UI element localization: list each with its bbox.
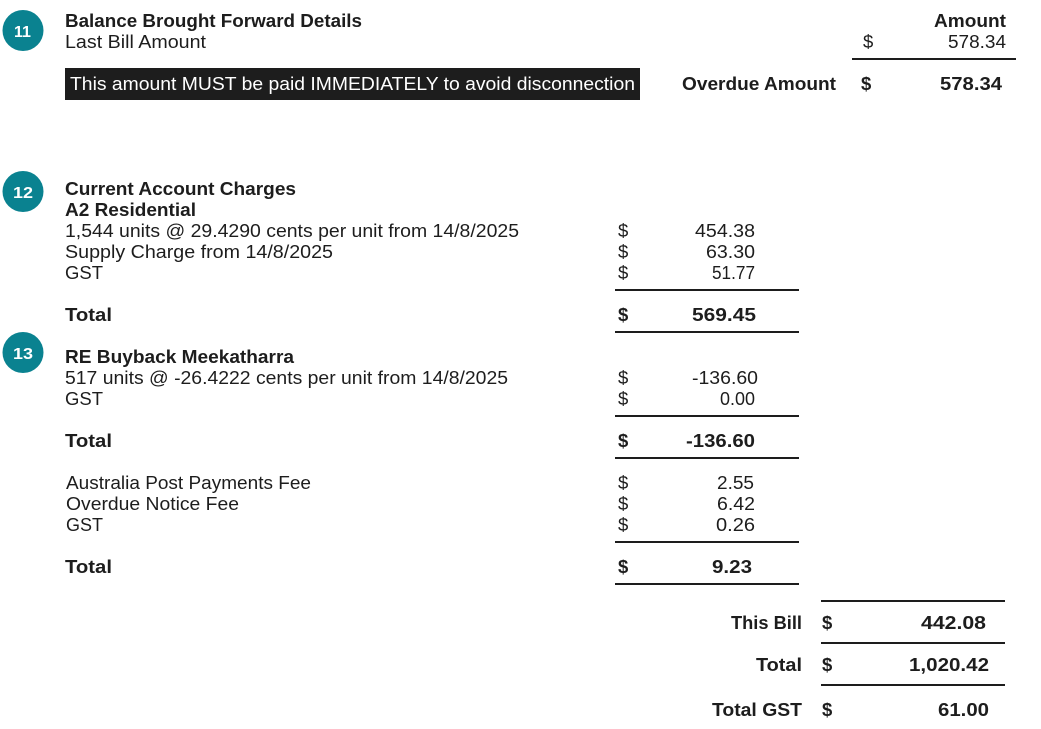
total row: $: [618, 304, 629, 325]
total row: $: [822, 654, 833, 675]
total row: Total: [756, 654, 802, 675]
total row: Total: [65, 304, 112, 325]
buyback units row: $: [618, 367, 628, 388]
total row: Total: [65, 556, 112, 577]
this bill row: $: [822, 612, 833, 633]
overdue amount row: [682, 73, 1003, 94]
heading: current account charges: Current Account Charges: [65, 178, 296, 199]
overdue notice fee row: 6.42: [717, 493, 755, 514]
overdue amount row: Overdue Amount: [682, 73, 836, 94]
supply charge row: Supply Charge from 14/8/2025: [65, 241, 333, 262]
total row: -136.60: [686, 430, 755, 451]
this bill row: 442.08: [921, 612, 986, 633]
this bill row: [731, 612, 986, 633]
last bill amount row: $: [863, 31, 873, 52]
amount column heading: Amount: [934, 10, 1006, 31]
heading: balance brought forward details: Balance Brought Forward Details: [65, 10, 362, 31]
total row: 9.23: [712, 556, 752, 577]
Australia Post fee row: [66, 472, 754, 493]
total GST row: 61.00: [938, 699, 989, 720]
GST row: [65, 388, 755, 409]
GST row: [66, 514, 755, 535]
badge 13: [2, 332, 44, 373]
total row: 1,020.42: [909, 654, 989, 675]
total GST row: $: [822, 699, 833, 720]
overdue notice fee row: $: [618, 493, 628, 514]
Australia Post fee row: Australia Post Payments Fee: [66, 472, 311, 493]
heading: RE buyback Meekatharra: RE Buyback Meekatharra: [65, 346, 295, 367]
total GST row: [712, 699, 989, 720]
supply charge row: $: [618, 241, 628, 262]
overdue amount row: $: [861, 73, 872, 94]
supply charge row: 63.30: [706, 241, 755, 262]
buyback units row: -136.60: [692, 367, 758, 388]
overdue notice fee row: Overdue Notice Fee: [66, 493, 239, 514]
badge 11: 11: [14, 24, 31, 41]
total row: [756, 654, 989, 675]
usage charge row: [65, 220, 755, 241]
last bill amount row: 578.34: [948, 31, 1006, 52]
total row: [65, 430, 755, 451]
Australia Post fee row: $: [618, 472, 628, 493]
disconnection warning banner: This amount MUST be paid IMMEDIATELY to avoid disconnection: [70, 73, 635, 94]
total row: [65, 556, 752, 577]
badge 13: 13: [13, 346, 33, 363]
badge 11: [2, 10, 44, 51]
section 12: current account charges: [2, 171, 799, 332]
GST row: 51.77: [712, 262, 755, 283]
GST row: 0.26: [716, 514, 755, 535]
GST row: GST: [65, 262, 103, 283]
usage charge row: $: [618, 220, 628, 241]
total row: $: [618, 430, 629, 451]
summary totals: [712, 601, 1005, 720]
total row: $: [618, 556, 629, 577]
buyback units row: [65, 367, 758, 388]
overdue amount row: 578.34: [940, 73, 1003, 94]
section 11: balance brought forward: [2, 10, 1016, 100]
usage charge row: 1,544 units @ 29.4290 cents per unit from 14/8/2025: [65, 220, 519, 241]
last bill amount row: Last Bill Amount: [65, 31, 206, 52]
GST row: $: [618, 262, 628, 283]
overdue notice fee row: [66, 493, 755, 514]
total row: Total: [65, 430, 112, 451]
buyback units row: 517 units @ -26.4222 cents per unit from 14/8/2025: [65, 367, 508, 388]
GST row: $: [618, 514, 628, 535]
usage charge row: 454.38: [695, 220, 755, 241]
GST row: 0.00: [720, 388, 755, 409]
sub-heading: A2 residential: A2 Residential: [65, 199, 196, 220]
GST row: GST: [66, 514, 103, 535]
disconnection warning banner: [65, 68, 640, 100]
badge 12: 12: [13, 185, 33, 202]
section 13: RE buyback: [2, 332, 799, 458]
this bill row: This Bill: [731, 612, 802, 633]
GST row: [65, 262, 755, 283]
section: fees: [65, 472, 799, 584]
total GST row: Total GST: [712, 699, 803, 720]
GST row: $: [618, 388, 628, 409]
Australia Post fee row: 2.55: [717, 472, 754, 493]
badge 12: [2, 171, 44, 212]
GST row: GST: [65, 388, 103, 409]
supply charge row: [65, 241, 755, 262]
last bill amount row: [65, 31, 1006, 52]
total row: [65, 304, 756, 325]
total row: 569.45: [692, 304, 756, 325]
